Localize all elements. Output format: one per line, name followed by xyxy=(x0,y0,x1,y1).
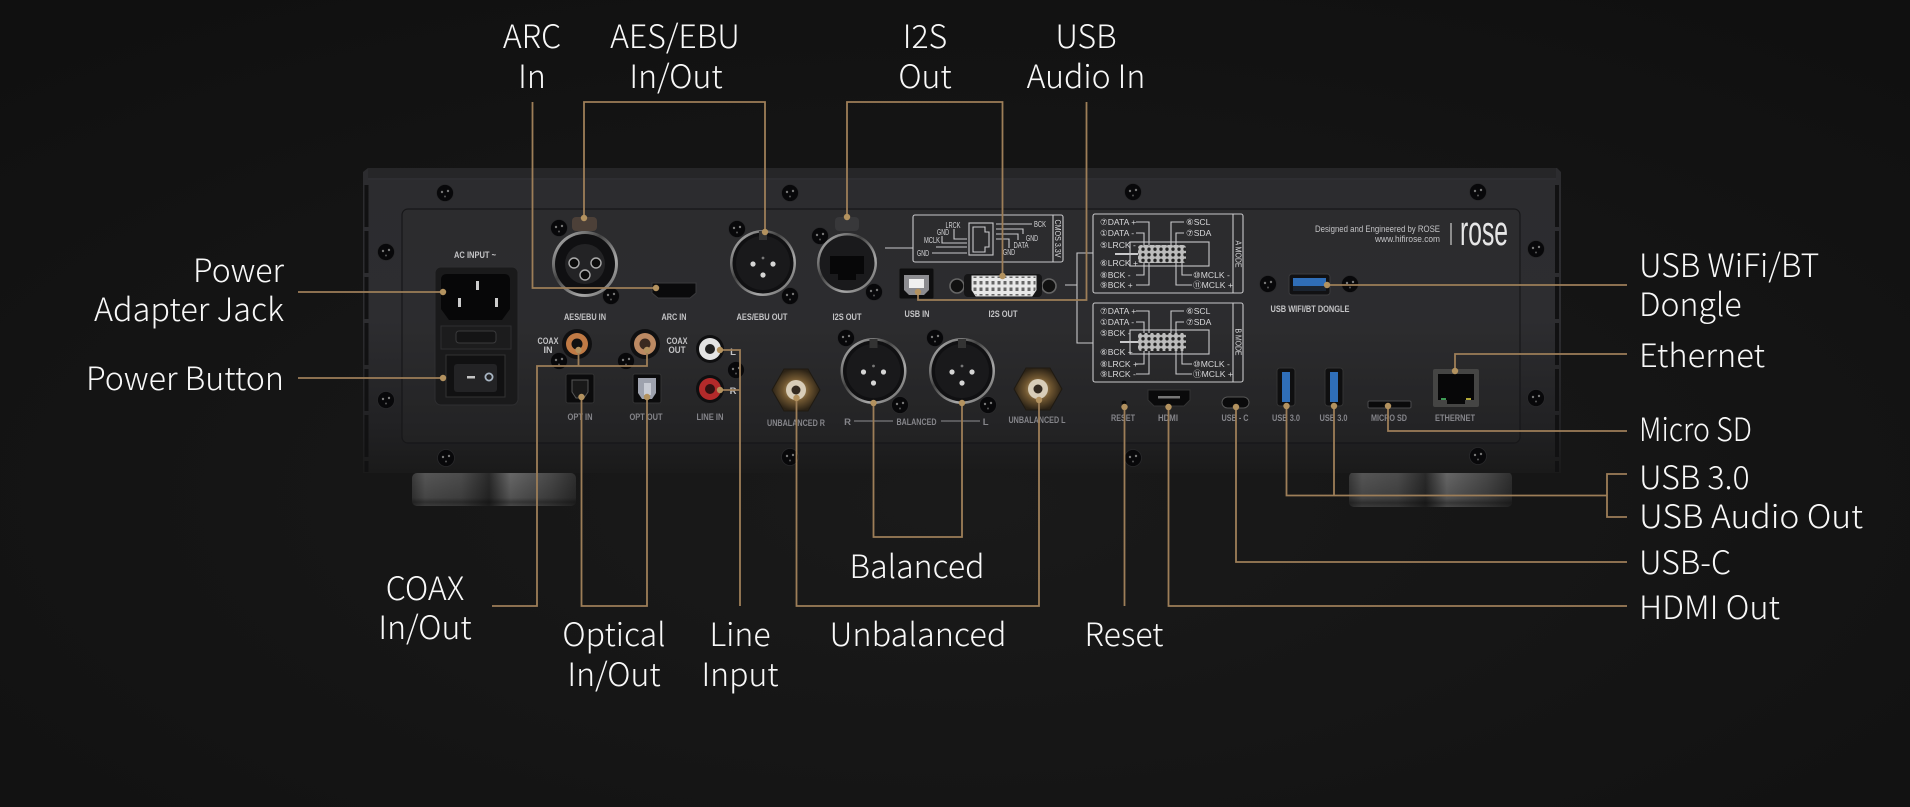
B mode pinout diagram: ⑨LRCK - xyxy=(1100,369,1136,379)
AC input label: AC INPUT ~ xyxy=(454,250,496,261)
line: USB 3.0 and USB audio out xyxy=(1283,403,1627,517)
DVI I2S out port xyxy=(950,274,1056,297)
B mode pinout diagram: ⑦DATA + xyxy=(1100,306,1136,316)
A mode pinout diagram: ⑧BCK - xyxy=(1100,270,1131,280)
line: unbalanced xyxy=(793,395,1042,606)
A mode pinout diagram: ⑦DATA + xyxy=(1100,217,1136,227)
B mode pinout diagram: ⑥BCK + xyxy=(1100,347,1133,357)
balanced XLR connectors: BALANCED xyxy=(896,417,937,428)
B mode pinout diagram: ①DATA - xyxy=(1100,317,1134,327)
line: ARC in xyxy=(532,102,659,291)
B mode pinout diagram: ⑩MCLK - xyxy=(1193,359,1230,369)
CMOS 3.3V pinout diagram: GND xyxy=(1003,247,1015,257)
bottom-right ports: MICRO SD xyxy=(1371,413,1407,424)
connector labels row one: I2S OUT xyxy=(988,309,1018,320)
label: Power Button: Power Button xyxy=(86,354,284,400)
line: power adapter jack xyxy=(298,289,446,295)
line: AES/EBU in/out xyxy=(581,102,768,235)
B mode pinout diagram: ⑥SCL xyxy=(1186,306,1211,316)
line input RCA jacks xyxy=(696,335,744,423)
bottom-right ports xyxy=(1111,368,1479,424)
label: COAX In/Out: In/Out xyxy=(378,603,472,649)
connector labels row one xyxy=(564,309,1018,323)
unbalanced R jack: UNBALANCED R xyxy=(767,418,825,429)
line: USB WiFi/BT dongle xyxy=(1324,282,1627,288)
label: USB WiFi/BT Dongle: USB WiFi/BT xyxy=(1639,241,1819,287)
A mode pinout diagram: ⑦SDA xyxy=(1186,228,1212,238)
optical connectors: OPT IN xyxy=(568,412,593,423)
USB B port xyxy=(899,268,934,299)
B mode pinout diagram: ⑤BCK - xyxy=(1100,328,1131,338)
device: rear panel of the audio streamer xyxy=(363,168,1561,507)
USB WiFi/BT dongle port xyxy=(1260,274,1358,295)
label: USB Audio Out: USB Audio Out xyxy=(1639,492,1863,538)
feet xyxy=(412,472,1512,507)
label: Optical In/Out: Optical xyxy=(562,610,666,656)
B mode pinout diagram: ⑪MCLK + xyxy=(1193,369,1233,379)
connector labels row one: AES/EBU OUT xyxy=(736,312,788,323)
AES/EBU out connector xyxy=(728,220,798,304)
line: I2S out xyxy=(844,102,1006,279)
balanced XLR connectors: L xyxy=(983,417,989,428)
label: I2S Out: I2S xyxy=(903,12,947,58)
B mode pinout diagram: B MODE xyxy=(1234,328,1244,356)
label: USB-C: USB-C xyxy=(1639,538,1731,584)
COAX connectors: OUT xyxy=(668,345,686,356)
line: HDMI out xyxy=(1165,404,1627,606)
optical connectors: OPT OUT xyxy=(630,412,663,423)
line: micro SD xyxy=(1385,403,1627,431)
B mode pinout diagram xyxy=(1093,303,1244,382)
COAX connectors: IN xyxy=(544,345,553,356)
label: AES/EBU In/Out: In/Out xyxy=(629,52,723,98)
label: Optical In/Out: In/Out xyxy=(567,650,661,696)
power inlet and rocker switch xyxy=(435,267,518,405)
ROSE branding xyxy=(1315,207,1508,254)
CMOS 3.3V pinout diagram: DATA xyxy=(1014,240,1029,250)
connector labels row one: USB IN xyxy=(904,309,930,320)
balanced XLR connectors: R xyxy=(844,417,851,428)
label: Power Adapter Jack xyxy=(94,246,285,331)
CMOS 3.3V pinout diagram: GND xyxy=(917,248,929,258)
connector labels row one: ARC IN xyxy=(662,312,687,323)
CMOS 3.3V pinout diagram: GND xyxy=(937,227,949,237)
balanced XLR connectors xyxy=(838,330,996,428)
bottom-right ports: USB 3.0 xyxy=(1320,413,1348,424)
label: Power Adapter Jack: Adapter Jack xyxy=(94,285,284,331)
chassis screws xyxy=(378,184,1544,466)
label: Power Adapter Jack: Power xyxy=(193,246,285,292)
label: Ethernet: Ethernet xyxy=(1639,331,1765,377)
line: reset xyxy=(1121,404,1128,606)
CMOS 3.3V pinout diagram: LRCK xyxy=(946,220,961,230)
unbalanced L jack xyxy=(1008,368,1066,426)
A mode pinout diagram: ⑥SCL xyxy=(1186,217,1211,227)
bottom-right ports: USB - C xyxy=(1222,413,1249,424)
label: AES/EBU In/Out: AES/EBU xyxy=(610,12,740,58)
line: balanced xyxy=(870,400,965,537)
A mode pinout diagram: ①DATA - xyxy=(1100,228,1134,238)
CMOS 3.3V pinout diagram: BCK xyxy=(1034,219,1046,229)
USB dongle label: USB WIFI/BT DONGLE xyxy=(1270,304,1350,315)
A mode pinout diagram: ⑩MCLK - xyxy=(1193,270,1230,280)
unbalanced R jack xyxy=(767,369,825,429)
line input RCA jacks: L xyxy=(730,347,736,358)
ROSE branding: rose xyxy=(1460,207,1508,254)
ROSE branding: www.hifirose.com xyxy=(1374,234,1440,245)
label: Balanced: Balanced xyxy=(850,542,984,588)
connector labels row one: I2S OUT xyxy=(832,312,862,323)
ROSE branding: Designed and Engineered by ROSE xyxy=(1315,224,1440,235)
line: power button xyxy=(298,375,446,381)
CMOS 3.3V pinout diagram: CMOS 3.3V xyxy=(1053,220,1063,258)
B mode pinout diagram: ⑧LRCK + xyxy=(1100,359,1138,369)
A mode pinout diagram xyxy=(1093,214,1244,293)
bottom-right ports: HDMI xyxy=(1158,413,1178,424)
label: Unbalanced: Unbalanced xyxy=(830,610,1006,656)
chassis xyxy=(363,168,1561,473)
A mode pinout diagram: ⑤LRCK - xyxy=(1100,240,1136,250)
label: ARC In: In xyxy=(518,52,546,98)
label: ARC In: ARC xyxy=(503,12,561,58)
I2S RJ45 connector xyxy=(812,217,882,300)
line input RCA jacks: R xyxy=(730,386,737,397)
DVI mode connector wire xyxy=(1065,253,1093,343)
label: Micro SD: Micro SD xyxy=(1639,405,1752,451)
label: USB WiFi/BT Dongle: Dongle xyxy=(1639,280,1742,326)
label: COAX In/Out: COAX xyxy=(386,564,464,610)
A mode pinout diagram: ⑥LRCK + xyxy=(1100,258,1138,268)
label: USB 3.0: USB 3.0 xyxy=(1639,453,1750,499)
CMOS 3.3V pinout diagram xyxy=(885,215,1063,262)
line input RCA jacks: LINE IN xyxy=(696,412,724,423)
callout lines xyxy=(298,102,1627,606)
optical connectors xyxy=(566,374,663,423)
COAX connectors: COAX xyxy=(538,336,559,347)
A mode pinout diagram: ⑪MCLK + xyxy=(1193,280,1233,290)
label: USB Audio In: USB xyxy=(1055,12,1117,58)
line: ethernet xyxy=(1452,354,1627,374)
A mode pinout diagram: ⑨BCK + xyxy=(1100,280,1133,290)
line: optical in/out xyxy=(578,394,650,606)
unbalanced L jack: UNBALANCED L xyxy=(1008,415,1066,426)
bottom-right ports: RESET xyxy=(1111,413,1135,424)
line: USB-C xyxy=(1233,404,1627,562)
COAX connectors: COAX xyxy=(666,336,688,347)
CMOS 3.3V pinout diagram: GND xyxy=(1026,233,1038,243)
connector labels row one: AES/EBU IN xyxy=(564,312,606,323)
ARC HDMI port xyxy=(652,283,696,298)
bottom-right ports: ETHERNET xyxy=(1435,413,1475,424)
line: line input xyxy=(717,347,740,606)
label: Line Input: Input xyxy=(701,650,779,696)
label: Reset: Reset xyxy=(1085,610,1163,656)
B mode pinout diagram: ⑦SDA xyxy=(1186,317,1212,327)
label: Line Input: Line xyxy=(709,610,771,656)
label: USB Audio In: Audio In xyxy=(1027,52,1145,98)
COAX connectors xyxy=(538,329,688,370)
A mode pinout diagram: A MODE xyxy=(1234,240,1244,268)
CMOS 3.3V pinout diagram: MCLK xyxy=(924,235,940,245)
AES/EBU in connector xyxy=(550,217,620,304)
label: HDMI Out: HDMI Out xyxy=(1639,583,1780,629)
label: I2S Out: Out xyxy=(898,52,952,98)
line: USB audio in xyxy=(915,102,1086,300)
line: COAX in/out xyxy=(492,347,650,606)
bottom-right ports: USB 3.0 xyxy=(1272,413,1300,424)
